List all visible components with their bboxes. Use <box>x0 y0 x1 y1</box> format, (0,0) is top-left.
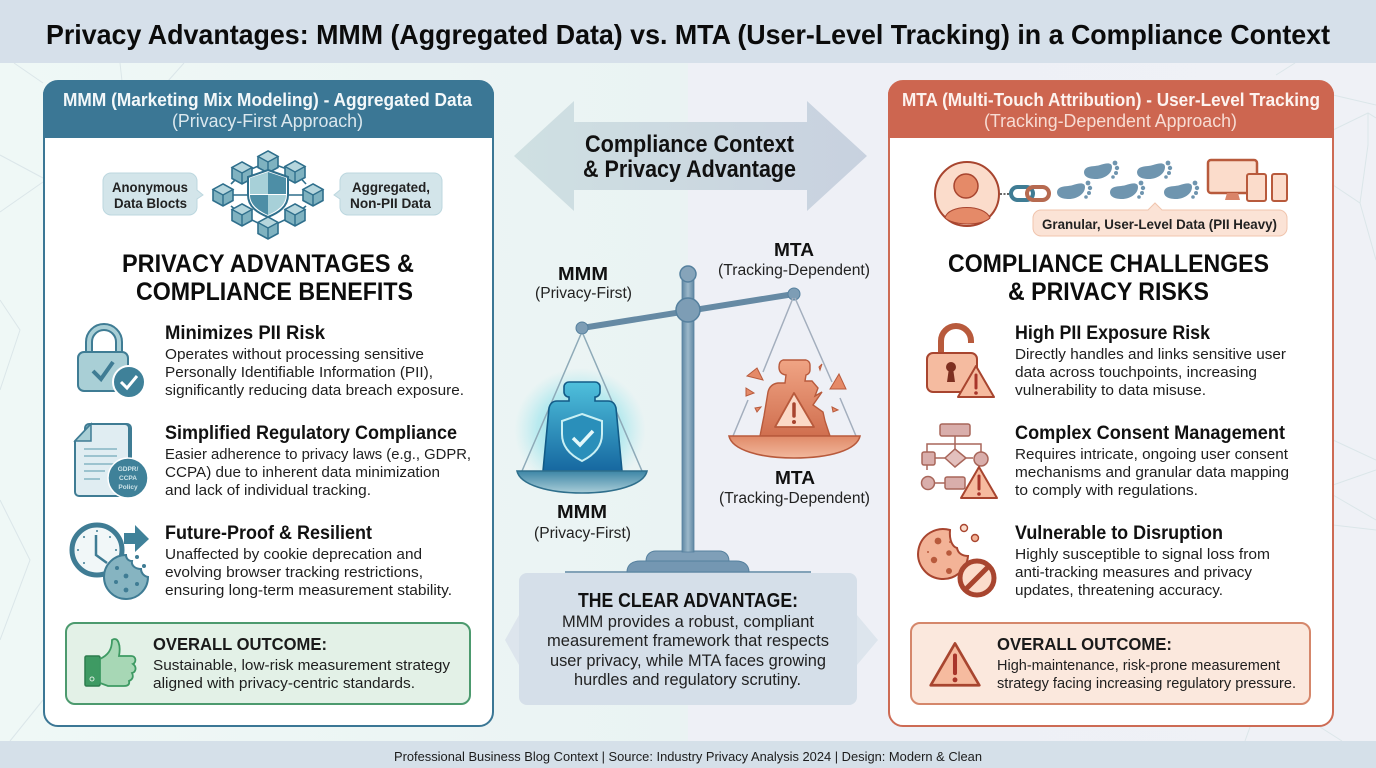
MTA panel header: (Tracking-Dependent Approach) <box>984 111 1237 131</box>
risk: complex consent management: to comply with regulations. <box>1015 483 1198 499</box>
arrow: compliance context: & Privacy Advantage <box>583 156 796 183</box>
callout: MMM overall outcome: Sustainable, low-risk measurement strategy <box>153 658 451 674</box>
heading: compliance challenges: & PRIVACY RISKS <box>1008 278 1209 306</box>
benefit: simplified regulatory compliance: Simplified Regulatory Compliance <box>165 423 457 444</box>
heading: privacy advantages: COMPLIANCE BENEFITS <box>136 278 413 306</box>
label: MMM upper: MMM <box>558 264 608 284</box>
risk: vulnerable to disruption: updates, threatening accuracy. <box>1015 583 1223 599</box>
benefit: simplified regulatory compliance: CCPA) due to inherent data minimization <box>165 465 440 481</box>
label: MTA upper: MTA <box>774 240 814 260</box>
risk: complex consent management: Requires intricate, ongoing user consent <box>1015 447 1288 463</box>
arrow: compliance context: Compliance Context <box>585 131 794 158</box>
risk: high PII exposure: High PII Exposure Risk <box>1015 323 1210 344</box>
label: granular user-level data: Granular, User-Level Data (PII Heavy) <box>1042 216 1277 232</box>
icon: compliance document: GDPR/ <box>118 466 138 473</box>
risk: complex consent management: Complex Consent Management <box>1015 423 1286 444</box>
MMM panel header: MMM (Marketing Mix Modeling) - Aggregated Data <box>63 90 473 110</box>
callout: MTA overall outcome <box>911 623 1310 704</box>
risk: complex consent management <box>1015 423 1289 499</box>
risk: vulnerable to disruption: Vulnerable to Disruption <box>1015 523 1223 544</box>
icon: warning triangle <box>931 643 979 685</box>
label: anonymous data blocks: Data Blocts <box>114 195 187 211</box>
benefit: future-proof and resilient: ensuring long-term measurement stability. <box>165 583 452 599</box>
icon: shield with data cubes <box>213 151 323 239</box>
callout: MTA overall outcome: strategy facing increasing regulatory pressure. <box>997 676 1296 692</box>
callout: the clear advantage: hurdles and regulatory scrutiny. <box>574 670 801 689</box>
label: aggregated non-PII data: Aggregated, <box>352 179 430 195</box>
label: aggregated non-PII data <box>334 173 442 215</box>
risk: high PII exposure: data across touchpoints, increasing <box>1015 365 1257 381</box>
MTA panel header: MTA (Multi-Touch Attribution) - User-Level Tracking <box>902 90 1320 110</box>
scale base <box>565 551 811 572</box>
icon: padlock with check <box>78 327 145 398</box>
panel: MTA <box>888 81 1334 726</box>
benefit: future-proof and resilient: Future-Proof & Resilient <box>165 523 373 544</box>
footer <box>0 741 1376 768</box>
label: MTA lower <box>719 468 870 507</box>
callout: the clear advantage <box>505 573 878 705</box>
label: MMM lower: (Privacy-First) <box>534 525 631 542</box>
label: MTA lower: MTA <box>775 468 815 488</box>
top title banner <box>0 0 1376 63</box>
right pan: MTA weight <box>729 298 860 458</box>
risk: high PII exposure: Directly handles and links sensitive user <box>1015 347 1286 363</box>
label: anonymous data blocks: Anonymous <box>112 179 188 195</box>
label: MTA upper: (Tracking-Dependent) <box>718 262 870 279</box>
MMM panel header <box>43 81 494 138</box>
benefit: minimizes PII risk: Operates without processing sensitive <box>165 347 424 363</box>
label: MMM lower <box>534 502 631 542</box>
callout: MMM overall outcome <box>66 623 470 704</box>
risk: vulnerable to disruption: Highly susceptible to signal loss from <box>1015 547 1270 563</box>
heading: compliance challenges: COMPLIANCE CHALLENGES <box>948 250 1269 278</box>
arrow: compliance context <box>514 101 867 211</box>
benefit: minimizes PII risk: significantly reducing data breach exposure. <box>165 383 464 399</box>
label: MMM lower: MMM <box>557 502 607 522</box>
icon: thumbs up <box>85 639 136 686</box>
icon: compliance document <box>75 424 148 498</box>
callout: the clear advantage: measurement framework that respects <box>547 631 829 650</box>
heading: privacy advantages: PRIVACY ADVANTAGES & <box>122 250 414 278</box>
icon: user tracked through footprints to devices <box>935 160 1287 226</box>
panel: MMM <box>43 81 494 726</box>
balance scale <box>514 266 860 572</box>
label: MMM upper <box>535 264 632 302</box>
benefit: future-proof and resilient: Unaffected by cookie deprecation and <box>165 547 422 563</box>
callout: the clear advantage: MMM provides a robust, compliant <box>562 612 814 631</box>
benefit: simplified regulatory compliance: and lack of individual tracking. <box>165 483 371 499</box>
top title banner: Privacy Advantages: MMM (Aggregated Data) vs. MTA (User-Level Tracking) in a Compliance Context <box>46 19 1330 50</box>
left pan: MMM weight <box>514 334 647 493</box>
label: MTA upper <box>718 240 870 279</box>
risk: high PII exposure: vulnerability to data misuse. <box>1015 383 1206 399</box>
scale beam <box>582 294 794 328</box>
icon: consent flowchart with warning <box>922 424 997 498</box>
MMM panel header: (Privacy-First Approach) <box>172 111 363 131</box>
icon: clock and cookie <box>72 525 149 599</box>
label: anonymous data blocks <box>103 173 203 215</box>
callout: MMM overall outcome: OVERALL OUTCOME: <box>153 634 327 654</box>
benefit: simplified regulatory compliance: Easier adherence to privacy laws (e.g., GDPR, <box>165 447 471 463</box>
risk: vulnerable to disruption: anti-tracking measures and privacy <box>1015 565 1253 581</box>
icon: blocked cookie <box>918 524 994 595</box>
icon: compliance document: Policy <box>118 484 138 491</box>
label: aggregated non-PII data: Non-PII Data <box>350 195 431 211</box>
icon: compliance document: CCPA <box>119 475 137 482</box>
callout: MTA overall outcome: High-maintenance, risk-prone measurement <box>997 658 1280 674</box>
MTA panel header <box>888 81 1334 138</box>
benefit: minimizes PII risk: Personally Identifiable Information (PII), <box>165 365 433 381</box>
callout: the clear advantage: user privacy, while MTA faces growing <box>550 651 826 670</box>
callout: the clear advantage: THE CLEAR ADVANTAGE: <box>578 590 798 612</box>
benefit: future-proof and resilient: evolving browser tracking restrictions, <box>165 565 423 581</box>
callout: MMM overall outcome: aligned with privacy-centric standards. <box>153 676 415 692</box>
benefit: minimizes PII risk <box>165 323 464 399</box>
benefit: future-proof and resilient <box>165 523 452 599</box>
risk: vulnerable to disruption <box>1015 523 1270 599</box>
label: MTA lower: (Tracking-Dependent) <box>719 490 870 507</box>
risk: high PII exposure <box>1015 323 1286 399</box>
heading: compliance challenges <box>948 250 1269 306</box>
footer: Professional Business Blog Context | Source: Industry Privacy Analysis 2024 | Design: Modern & Clean <box>394 749 982 764</box>
risk: complex consent management: mechanisms and granular data mapping <box>1015 465 1289 481</box>
label: MMM upper: (Privacy-First) <box>535 285 632 302</box>
label: granular user-level data <box>1033 203 1287 236</box>
icon: open padlock with warning <box>927 326 994 397</box>
heading: privacy advantages <box>122 250 414 306</box>
benefit: minimizes PII risk: Minimizes PII Risk <box>165 323 325 344</box>
callout: MTA overall outcome: OVERALL OUTCOME: <box>997 634 1172 654</box>
benefit: simplified regulatory compliance <box>165 423 471 499</box>
